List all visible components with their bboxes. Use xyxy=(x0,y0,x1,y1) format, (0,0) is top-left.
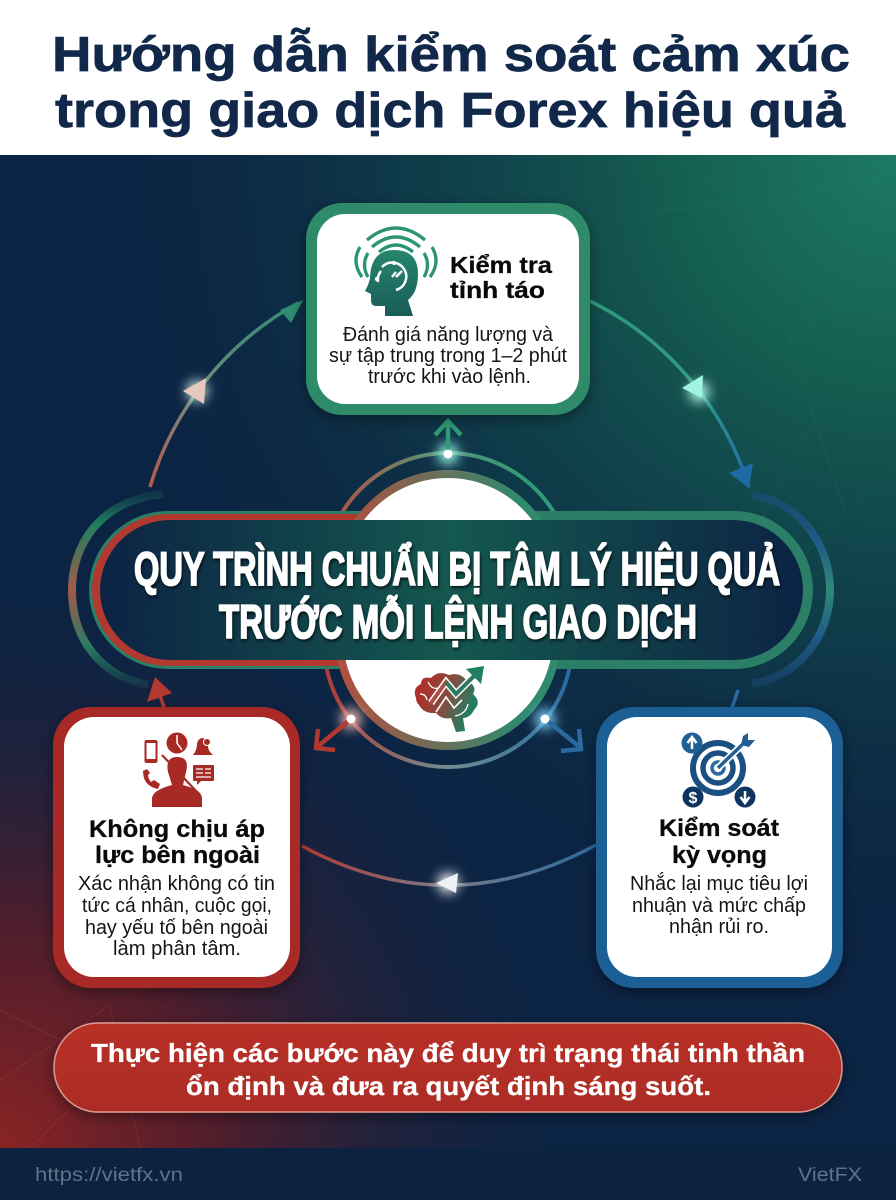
card body: nhận rủi ro. xyxy=(669,916,769,938)
footer bar: https://vietfx.vn xyxy=(35,1164,183,1186)
title xyxy=(52,28,850,138)
card title: Kiểm tra xyxy=(450,252,553,278)
callout banner xyxy=(54,1023,842,1112)
card title: lực bên ngoài xyxy=(95,842,260,869)
card body xyxy=(329,324,567,388)
card title: tỉnh táo xyxy=(450,277,545,303)
card title: Kiểm soát xyxy=(659,815,779,842)
card body xyxy=(78,873,275,960)
card title xyxy=(659,815,779,869)
card body: sự tập trung trong 1–2 phút xyxy=(329,345,567,367)
outer arc: right xyxy=(752,495,830,684)
cycle arc: left side to top card xyxy=(150,300,303,487)
card body: Nhắc lại mục tiêu lợi xyxy=(630,872,808,895)
panel: left card xyxy=(53,707,300,988)
card body: tức cá nhân, cuộc gọi, xyxy=(82,895,272,917)
card body: hay yếu tố bên ngoài xyxy=(85,917,268,939)
card title xyxy=(89,816,265,869)
footer bar: VietFX xyxy=(798,1164,862,1186)
header background xyxy=(0,0,896,155)
node with arrow: lower left xyxy=(316,709,361,750)
card body: trước khi vào lệnh. xyxy=(368,366,531,388)
callout banner: ổn định và đưa ra quyết định sáng suốt. xyxy=(186,1071,711,1101)
card body: Đánh giá năng lượng và xyxy=(343,324,554,346)
card body xyxy=(630,872,808,938)
central heading text: TRƯỚC MỖI LỆNH GIAO DỊCH xyxy=(219,595,697,648)
card title: Không chịu áp xyxy=(89,816,265,843)
title: Hướng dẫn kiểm soát cảm xúc xyxy=(52,28,850,82)
thin center ring xyxy=(324,453,572,767)
cycle arc: top card to right card xyxy=(590,301,753,488)
connector: left card to outer arc xyxy=(147,677,172,707)
cycle arc: right card to left card xyxy=(302,845,596,893)
central heading pill xyxy=(89,474,813,746)
panel: right card xyxy=(596,707,843,988)
icon: brain with arrow xyxy=(415,666,484,732)
panel: top card xyxy=(306,203,590,415)
card body: Xác nhận không có tin xyxy=(78,873,275,895)
card title: kỳ vọng xyxy=(672,842,767,869)
icon: person with distractions xyxy=(143,732,214,807)
central heading text xyxy=(134,542,780,648)
card body: làm phân tâm. xyxy=(113,938,241,960)
title: trong giao dịch Forex hiệu quả xyxy=(55,84,846,138)
node with arrow: top xyxy=(435,421,461,464)
card body: nhuận và mức chấp xyxy=(632,895,806,917)
node with arrow: lower right xyxy=(535,709,581,751)
callout banner: Thực hiện các bước này để duy trì trạng thái tinh thần xyxy=(91,1038,805,1068)
outer arc: left xyxy=(72,494,163,685)
icon: head with clock and waves xyxy=(356,228,436,316)
center ring with brain icon xyxy=(339,474,557,746)
icon: target with arrow xyxy=(682,732,756,808)
card title xyxy=(450,252,553,303)
connector: right card to outer arc xyxy=(732,690,738,708)
icon: target with arrow: $ xyxy=(689,790,698,807)
footer bar xyxy=(0,1148,896,1200)
